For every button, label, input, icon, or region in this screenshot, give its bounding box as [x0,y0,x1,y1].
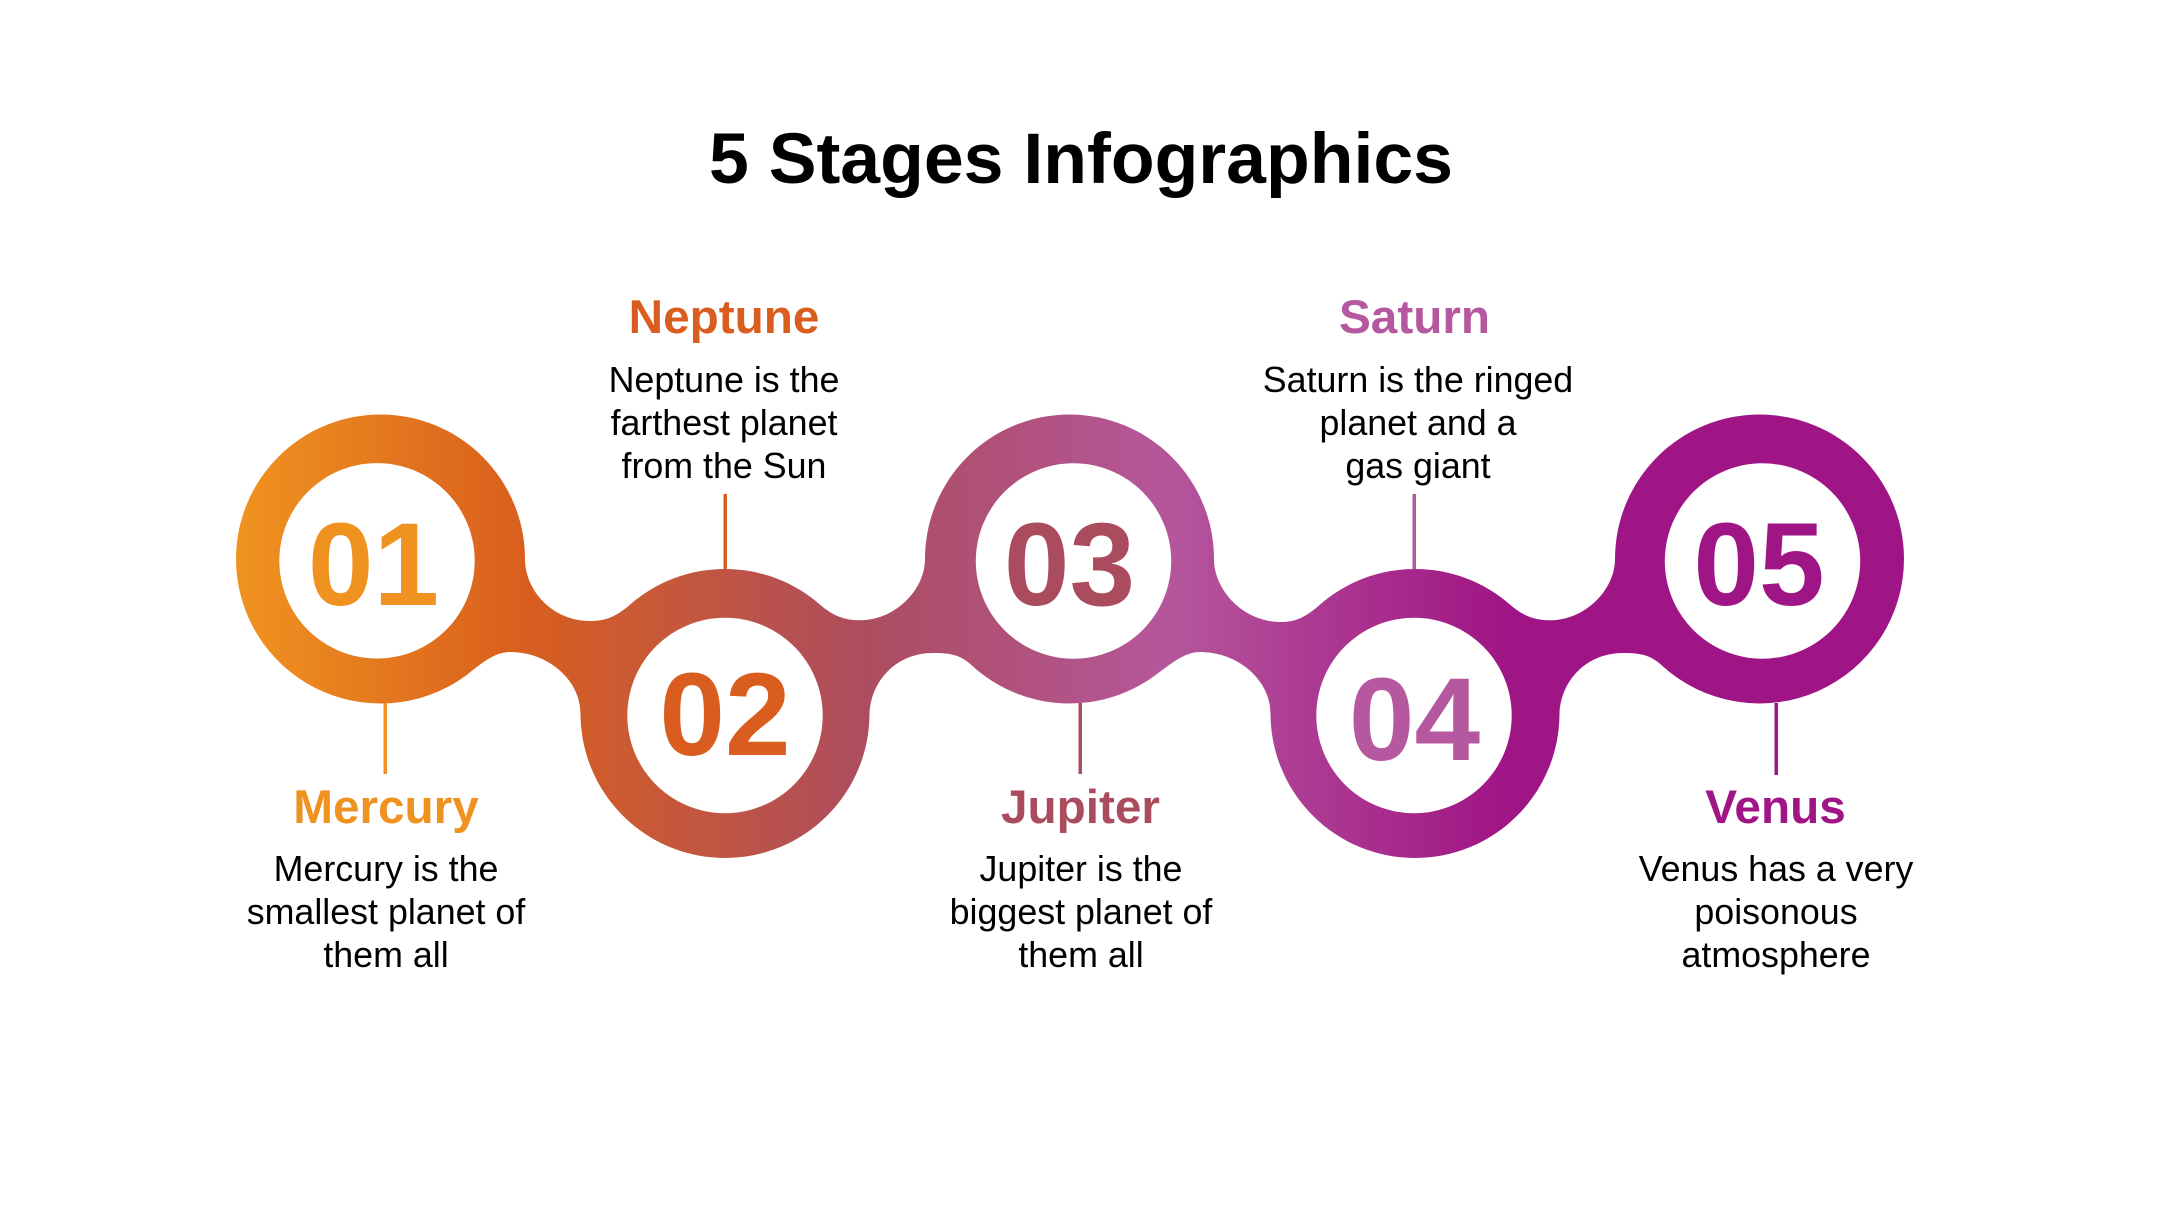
Venus text block: Venus [1705,781,1846,834]
Neptune text block: Neptune [629,291,819,344]
stage 02 [627,618,823,813]
title: 5 Stages Infographics [709,119,1453,199]
Saturn text block: Saturn is the ringed [1263,360,1573,400]
stage 05 [1665,463,1860,659]
Jupiter text block: biggest planet of [950,892,1212,932]
stage 04: 04 [1349,654,1480,786]
connector lines [384,494,1778,775]
Jupiter text block: them all [1018,935,1144,975]
stage 01: 01 [308,499,439,631]
stage 05: 05 [1693,499,1825,631]
Mercury text block: smallest planet of [247,892,525,932]
Saturn text block [1263,291,1573,486]
stage 03: 03 [1004,499,1135,631]
Jupiter text block: Jupiter [1001,781,1160,834]
Venus text block: poisonous [1694,892,1858,932]
Mercury text block: Mercury [293,781,479,834]
stage 04 [1316,618,1512,813]
wavy ribbon with five linked rings [236,414,1904,858]
Venus text block: atmosphere [1681,935,1871,975]
Mercury text block [247,781,525,975]
stage 02: 02 [659,649,791,781]
Saturn text block: Saturn [1339,291,1490,344]
Neptune text block [609,291,839,486]
Neptune text block: farthest planet [611,403,837,443]
stage 01 [279,463,475,658]
Venus text block: Venus has a very [1639,849,1913,889]
stage 03 [976,463,1171,659]
Saturn text block: gas giant [1345,446,1491,486]
Jupiter text block [950,781,1212,975]
Mercury text block: Mercury is the [274,849,498,889]
Neptune text block: Neptune is the [609,360,839,400]
Neptune text block: from the Sun [622,446,826,486]
Venus text block [1639,781,1913,975]
Jupiter text block: Jupiter is the [980,849,1182,889]
Mercury text block: them all [323,935,449,975]
Saturn text block: planet and a [1319,403,1517,443]
